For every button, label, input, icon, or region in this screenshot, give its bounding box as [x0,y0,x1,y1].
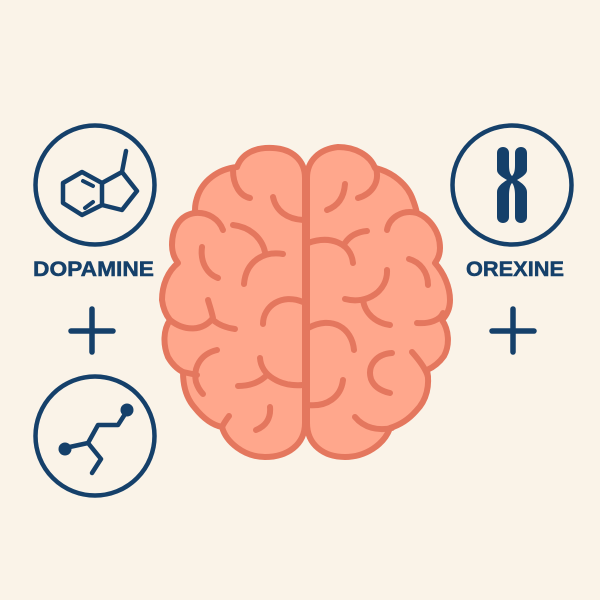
brain: central fissure [302,172,310,428]
brain: left hemisphere folds [170,170,303,430]
brain: left hemisphere outline [162,148,305,457]
label: orexine: OREXINE [466,258,564,281]
icon: plus right [492,309,534,352]
icon: chromosome in circle [452,126,572,244]
brain: right hemisphere outline [307,147,450,457]
icon: plus left [71,309,113,352]
illustration: brain [162,147,450,457]
icon: branched molecule in circle [36,376,154,496]
icon: dopamine molecule in circle [36,126,154,244]
brain: right hemisphere folds [308,168,443,429]
label: dopamine: DOPAMINE [33,258,154,281]
